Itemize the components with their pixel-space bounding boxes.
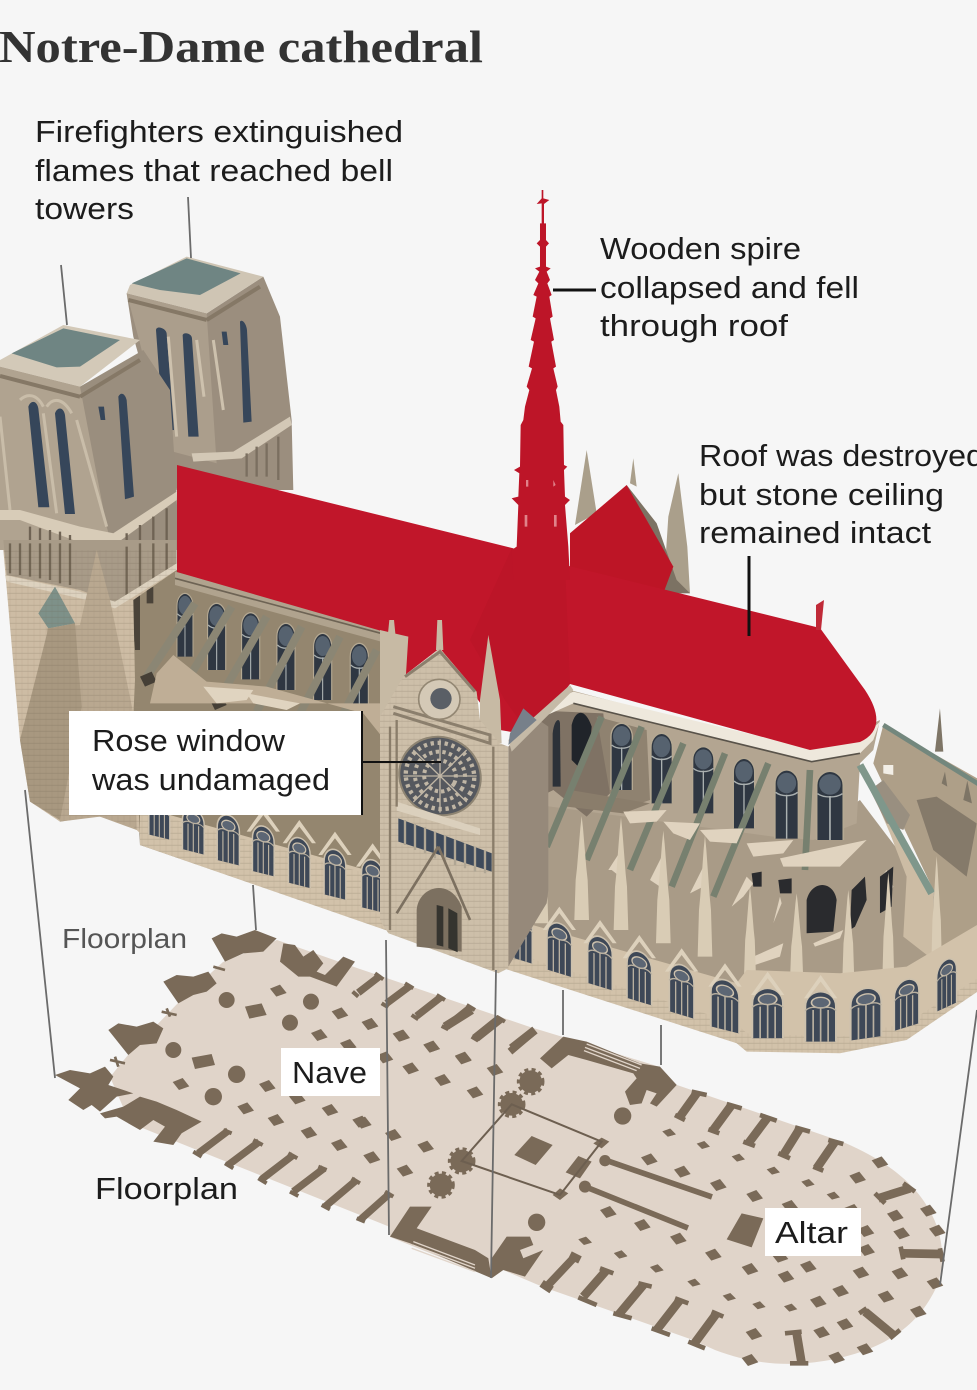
label: wooden spire: Wooden spire <box>600 231 801 266</box>
nave lower chapel windows <box>149 797 384 913</box>
label: wooden spire <box>600 231 859 343</box>
label: firefighters <box>35 114 403 226</box>
callout: altar: Altar <box>775 1215 848 1250</box>
arrow: spire leader <box>553 288 596 292</box>
callout: nave: Nave <box>292 1055 367 1090</box>
cathedral building <box>0 190 977 1053</box>
floorplan diagram <box>55 930 946 1366</box>
label: firefighters: Firefighters extinguished <box>35 114 403 149</box>
spire <box>512 190 570 580</box>
choir gables <box>543 907 837 998</box>
arrow: rose leader <box>362 711 441 815</box>
rose window <box>385 722 495 830</box>
transept gallery <box>398 818 492 873</box>
choir right slanted wall <box>860 763 933 960</box>
roof <box>177 465 876 750</box>
choir lower wall <box>503 917 977 1053</box>
choir pinnacles <box>535 816 942 980</box>
roof shading <box>470 548 570 735</box>
callout: rose window: was undamaged <box>91 762 330 797</box>
callout: rose window: Rose window <box>92 723 286 758</box>
label: roof: Roof was destroyed <box>699 438 977 473</box>
ambulatory windows <box>752 867 893 933</box>
label: wooden spire: collapsed and fell <box>600 270 859 305</box>
label: floorplan: Floorplan <box>95 1171 238 1206</box>
label: firefighters: towers <box>35 191 134 226</box>
upper rose <box>419 679 460 719</box>
portal <box>397 847 470 952</box>
west front of floorplan <box>55 930 355 1145</box>
nave clerestory windows <box>177 593 368 710</box>
gable band <box>393 652 490 743</box>
transept front face <box>380 648 508 973</box>
choir <box>503 690 977 1053</box>
label: roof: remained intact <box>699 515 931 550</box>
label: grey floorplan: Floorplan <box>62 923 187 954</box>
transept side wall <box>508 718 548 967</box>
label: firefighters: flames that reached bell <box>35 153 393 188</box>
label: roof: but stone ceiling <box>699 477 944 512</box>
choir upper windows <box>553 713 843 840</box>
title: Notre-Dame cathedral <box>0 21 483 72</box>
transept band <box>397 802 480 835</box>
nave columns <box>165 973 532 1222</box>
crossing and transepts <box>355 1010 712 1290</box>
front tower lower <box>3 540 177 833</box>
choir lower windows <box>508 906 956 1042</box>
choir columns and apse <box>578 1092 946 1366</box>
front tower upper <box>0 325 178 550</box>
choir white ledge <box>528 692 880 762</box>
nave flying buttresses <box>147 603 377 713</box>
arrow: roof leader <box>748 556 750 636</box>
nave parapet <box>175 572 393 645</box>
callout: nave <box>281 1048 380 1096</box>
choir flying buttresses <box>547 717 932 897</box>
roof finial <box>816 600 824 630</box>
rear ambulatory wall <box>873 725 977 990</box>
transept pinnacles and finial <box>380 620 502 743</box>
floor surface <box>110 940 942 1364</box>
label: roof <box>699 438 977 550</box>
rear transept roof and pinnacles <box>570 450 690 593</box>
label: wooden spire: through roof <box>600 308 788 343</box>
transept facade <box>380 620 573 973</box>
back tower <box>127 257 293 490</box>
choir upper wall <box>527 690 880 840</box>
nave gables <box>247 808 389 867</box>
choir terrace <box>527 800 937 1023</box>
callout: rose window <box>69 711 362 815</box>
lit terrace patches <box>608 810 893 965</box>
nave lower wall <box>140 807 390 932</box>
nave buttresses <box>198 976 532 1220</box>
callout: altar <box>765 1208 861 1256</box>
upper rose centre <box>430 688 452 709</box>
tower poles and projection lines <box>25 197 977 1285</box>
upper parts of nave wall <box>127 570 397 933</box>
